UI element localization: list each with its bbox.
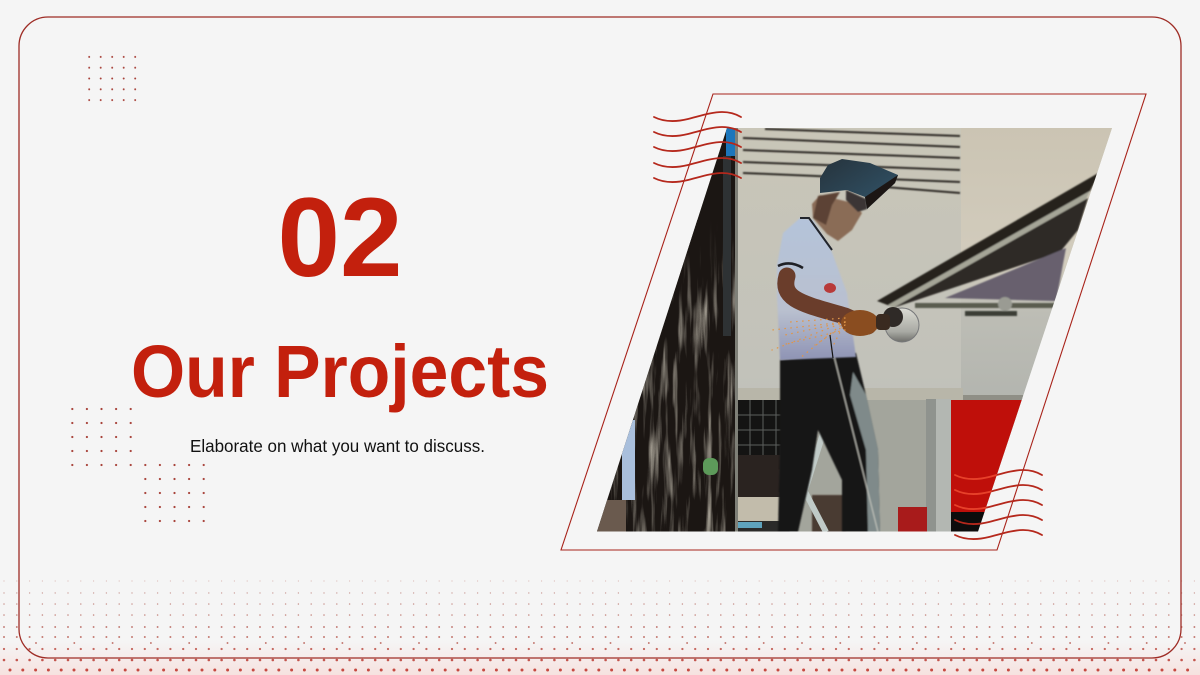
section number: 02 — [278, 175, 402, 300]
halftone dot band — [4, 581, 1200, 670]
ladder — [792, 424, 826, 532]
louvres — [743, 129, 960, 193]
dark column — [590, 128, 738, 532]
small red sign — [898, 507, 927, 532]
metal sheet — [877, 172, 1100, 316]
black base — [951, 512, 984, 532]
window grid — [736, 400, 791, 532]
wave highlights on red panel — [954, 474, 997, 510]
wave stamp: bottom right — [955, 470, 1042, 539]
photo: welder grinding metal — [590, 128, 1121, 535]
subtitle: Elaborate on what you want to discuss. — [190, 436, 485, 456]
dot grid: lower left — [134, 458, 207, 528]
lower wall section — [798, 398, 1022, 532]
arm — [786, 276, 868, 326]
pink glow under dots — [0, 640, 1200, 675]
section title: Our Projects — [131, 330, 549, 413]
grey pillar — [936, 399, 951, 532]
objects between the legs — [812, 495, 846, 532]
right ledge — [963, 395, 1023, 400]
shirt — [777, 218, 856, 360]
head — [812, 190, 867, 241]
wave stamp: top left — [654, 112, 741, 182]
shirt collar and logo — [778, 218, 836, 293]
jeans — [778, 340, 880, 532]
cable — [830, 335, 833, 358]
dot grid: top left — [84, 52, 141, 106]
glove and grinder — [841, 307, 919, 342]
wall backdrop — [590, 128, 1120, 532]
welding helmet — [820, 159, 898, 209]
right wall panel — [961, 128, 1121, 400]
red panel — [951, 400, 1026, 512]
parallelogram outline — [561, 94, 1146, 550]
dot grid: middle left — [65, 402, 138, 472]
sparks — [772, 318, 845, 358]
ledge — [738, 388, 963, 400]
